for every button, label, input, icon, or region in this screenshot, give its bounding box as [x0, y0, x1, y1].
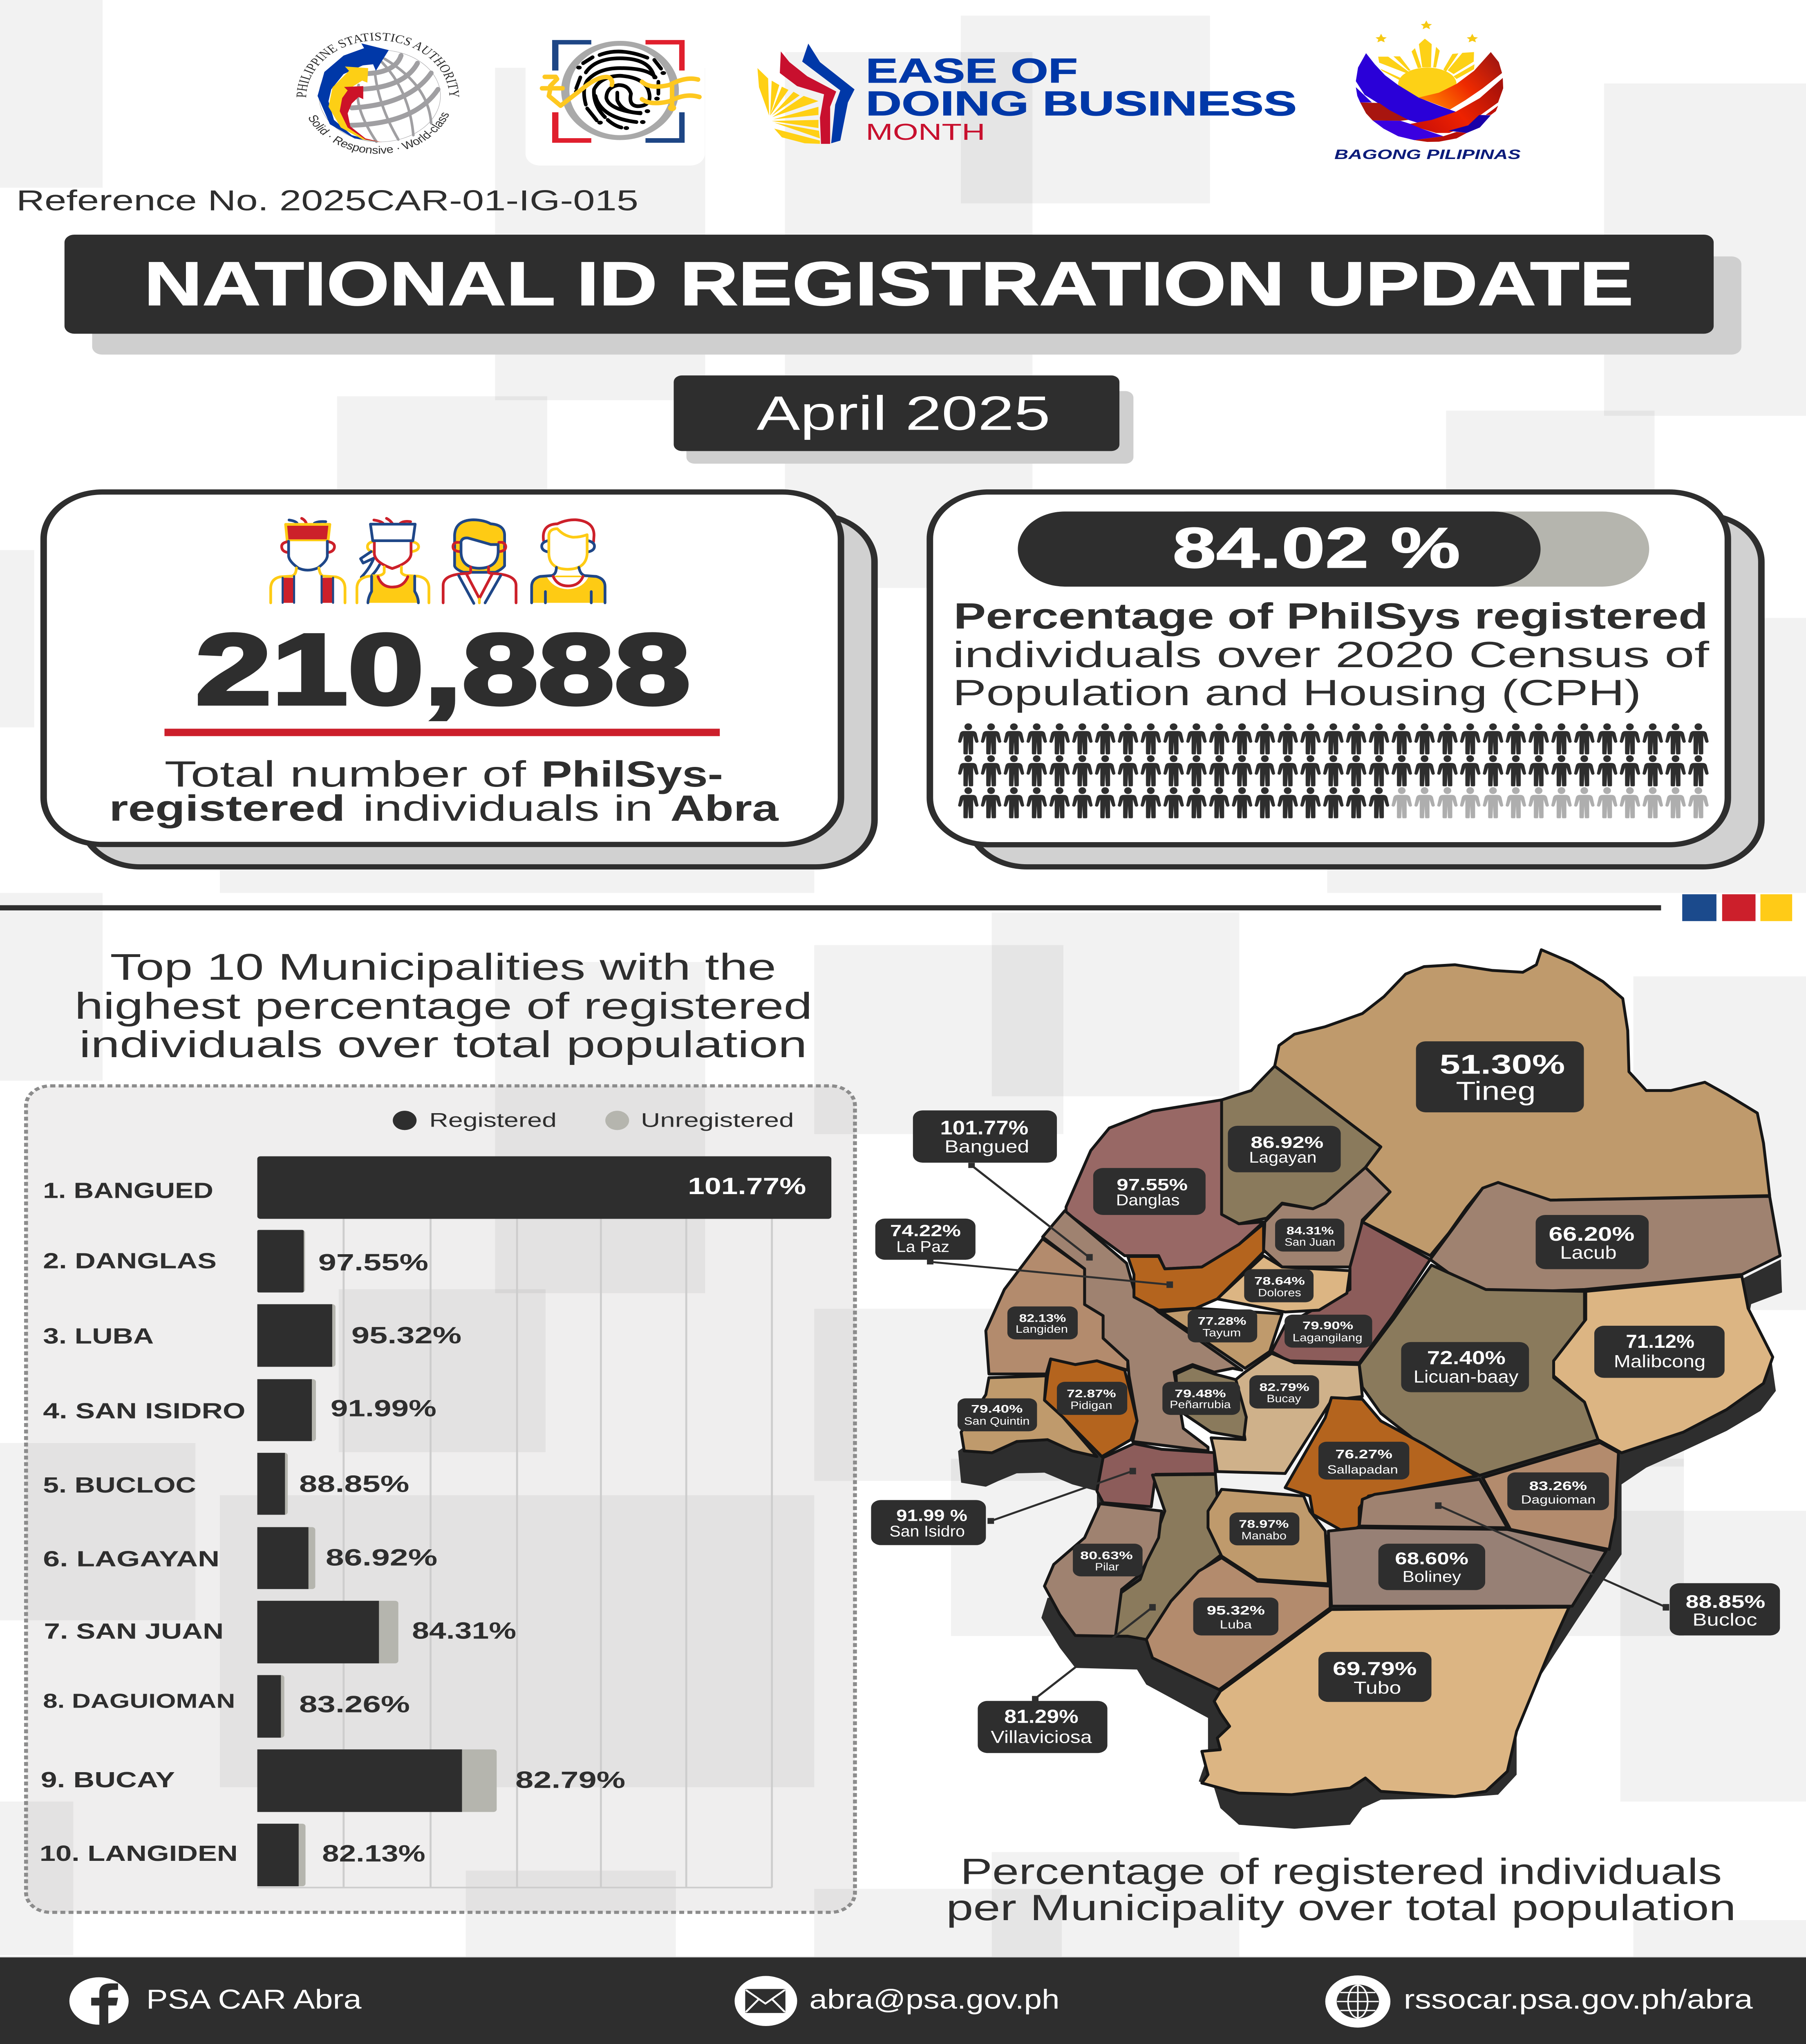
red underline	[164, 729, 720, 736]
region: Bucloc	[1359, 1479, 1507, 1528]
legend: Registered	[429, 1109, 557, 1131]
bar: Bucay: 9. BUCAY	[41, 1767, 175, 1792]
description: PhilSys-	[542, 754, 723, 795]
region: San Quintin	[961, 1376, 1097, 1457]
seal ring text	[293, 30, 462, 156]
bar: Langiden: 10. LANGIDEN	[40, 1840, 238, 1865]
label: Danglas: Danglas	[1116, 1192, 1179, 1209]
region: Pidigan	[1045, 1359, 1137, 1457]
bar: Bucay: 82.79%	[515, 1766, 625, 1793]
logo: Philippine Statistics Authority seal	[293, 30, 462, 156]
label: Bucloc: 88.85%	[1686, 1591, 1765, 1612]
panel: percentage of registered individuals	[930, 492, 1761, 867]
heading: top 10 municipalities	[74, 946, 812, 1065]
label: Sallapadan: 76.27%	[1335, 1448, 1392, 1461]
label: San Isidro: 91.99 %	[896, 1506, 967, 1524]
region: Dolores	[1217, 1256, 1350, 1312]
wordmark: DOING BUSINESS	[866, 84, 1297, 123]
region: Lacub	[1430, 1183, 1780, 1293]
progress pill	[1018, 511, 1649, 587]
legend	[393, 1109, 794, 1131]
label: Manabo	[1229, 1513, 1299, 1545]
label: San Juan: San Juan	[1285, 1237, 1335, 1248]
label: Daguioman: 83.26%	[1529, 1479, 1587, 1493]
label: Malibcong: Malibcong	[1614, 1351, 1705, 1371]
section divider	[0, 894, 1792, 921]
label: Daguioman	[1507, 1472, 1609, 1510]
region: Bucay	[1211, 1353, 1362, 1473]
label: San Quintin: 79.40%	[971, 1403, 1023, 1415]
region: La Paz	[1128, 1224, 1264, 1310]
label: Manabo: Manabo	[1242, 1531, 1287, 1542]
description: registered	[109, 788, 345, 829]
seal ring text: Solid · Responsive · World-class	[305, 110, 452, 156]
bar: Danglas: 97.55%	[318, 1249, 428, 1275]
label: San Isidro: San Isidro	[889, 1523, 965, 1540]
progress pill: 84.02 %	[1173, 515, 1460, 580]
heading: top 10 municipalities: highest percentage of registered	[74, 985, 812, 1026]
title banner: NATIONAL ID REGISTRATION UPDATE	[144, 249, 1634, 318]
wordmark: MONTH	[866, 120, 985, 145]
map caption: per Municipality over total population	[946, 1888, 1736, 1928]
label: Bangued: Bangued	[944, 1137, 1029, 1156]
label: Penarrubia: Peñarrubia	[1170, 1399, 1231, 1411]
date banner	[674, 375, 1133, 464]
bar: Luba	[43, 1304, 461, 1367]
wordmark: EASE OF	[866, 52, 1078, 90]
label: Dolores	[1244, 1269, 1314, 1302]
logo: fingerprint PhilSys mark	[526, 0, 705, 166]
bar: Luba: 95.32%	[351, 1322, 461, 1348]
label: Sallapadan	[1318, 1442, 1409, 1479]
bar: Danglas	[43, 1230, 428, 1293]
icon: facebook	[69, 1977, 129, 2025]
label: Lagayan	[1228, 1126, 1341, 1172]
map regions south	[1045, 1398, 1618, 1796]
bar: Langiden: 82.13%	[322, 1840, 425, 1867]
bar: San Isidro: 91.99%	[331, 1395, 436, 1421]
label: Bucay	[1249, 1375, 1319, 1408]
bar: San Isidro: 4. SAN ISIDRO	[43, 1398, 245, 1423]
region: Lagayan	[1222, 1066, 1381, 1224]
label: Lagangilang	[1285, 1315, 1372, 1348]
region: Licuan-baay	[1359, 1265, 1598, 1475]
region: Villaviciosa	[1115, 1475, 1222, 1640]
region: Tubo	[1202, 1607, 1569, 1796]
region: Danglas	[1066, 1100, 1264, 1269]
label: Penarrubia: 79.48%	[1175, 1387, 1226, 1400]
label: Boliney: Boliney	[1403, 1568, 1461, 1585]
label: Lacub: Lacub	[1560, 1242, 1617, 1263]
map extrusion shadow	[958, 1260, 1782, 1829]
description: individuals in	[363, 788, 653, 829]
wordmark	[866, 52, 1297, 145]
text: website: rssocar.psa.gov.ph/abra	[1404, 1984, 1753, 2015]
label: Tineg	[1416, 1041, 1584, 1112]
bar: San Juan: 84.31%	[412, 1617, 516, 1644]
date banner: April 2025	[756, 386, 1050, 440]
label: Villaviciosa	[978, 1701, 1108, 1753]
bar: Bucloc: 88.85%	[299, 1470, 409, 1497]
map caption: Percentage of registered individuals	[960, 1851, 1722, 1892]
label: Licuan-baay: Licuan-baay	[1414, 1367, 1519, 1387]
label: San Juan	[1275, 1219, 1344, 1252]
label: Dolores: 78.64%	[1254, 1275, 1305, 1287]
bar: Luba: 3. LUBA	[43, 1323, 154, 1348]
label: Boliney: 68.60%	[1395, 1549, 1468, 1568]
label: San Quintin: San Quintin	[964, 1416, 1030, 1427]
label: San Isidro	[871, 1500, 986, 1545]
label: Lagangilang: 79.90%	[1302, 1320, 1353, 1332]
label: Malibcong	[1594, 1326, 1725, 1378]
region: Daguioman	[1483, 1443, 1618, 1549]
label: Pilar	[1073, 1544, 1143, 1576]
panel: top 10 bar chart	[26, 1086, 855, 1912]
icon: four people in traditional dress	[271, 518, 605, 603]
map: Abra municipalities	[871, 950, 1782, 1829]
label: Lagangilang: Lagangilang	[1293, 1332, 1363, 1344]
region: San Juan	[1264, 1168, 1390, 1267]
description: Percentage of PhilSys registered	[953, 596, 1708, 637]
bar: Bucloc: 5. BUCLOC	[43, 1472, 196, 1497]
text: facebook page: PSA CAR Abra	[146, 1984, 362, 2015]
region: Luba	[1146, 1558, 1330, 1690]
label: La Paz: La Paz	[896, 1238, 949, 1255]
bar: Lagayan: 6. LAGAYAN	[43, 1546, 219, 1571]
bar: Bucloc	[43, 1453, 409, 1515]
label: Langiden	[1007, 1307, 1078, 1339]
label: Tineg: 51.30%	[1439, 1049, 1565, 1080]
bar: Daguioman: 83.26%	[299, 1691, 410, 1717]
legend: Unregistered	[641, 1109, 794, 1131]
logo: Bagong Pilipinas: BAGONG PILIPINAS	[1334, 147, 1521, 162]
label: Bucay: Bucay	[1267, 1393, 1301, 1405]
region: Manabo	[1208, 1489, 1328, 1584]
description: individuals over 2020 Census of	[953, 634, 1710, 675]
bar: San Isidro	[43, 1379, 436, 1441]
label: Luba: Luba	[1220, 1618, 1252, 1631]
description: Total number of	[164, 754, 526, 795]
heading: top 10 municipalities: individuals over total population	[79, 1024, 807, 1065]
region: Lagangilang	[1271, 1222, 1430, 1363]
label: Luba: 95.32%	[1207, 1604, 1265, 1617]
bar: Bangued: 1. BANGUED	[43, 1178, 213, 1203]
label: Tayum: Tayum	[1202, 1327, 1241, 1339]
title banner	[65, 235, 1741, 354]
label: Villaviciosa: 81.29%	[1004, 1706, 1079, 1727]
label: Tubo: Tubo	[1354, 1678, 1401, 1698]
region: Pilar	[1045, 1504, 1162, 1636]
pictogram: people proportion	[958, 723, 1711, 819]
label: Malibcong: 71.12%	[1626, 1331, 1694, 1352]
total count: 210,888	[195, 613, 691, 725]
label: Bucloc: Bucloc	[1692, 1610, 1757, 1629]
description	[953, 596, 1710, 713]
label: Luba	[1193, 1598, 1278, 1636]
label: Bangued	[913, 1110, 1057, 1163]
bar: Danglas: 2. DANGLAS	[43, 1248, 217, 1273]
label: Licuan-baay	[1401, 1342, 1529, 1392]
bar: Daguioman: 8. DAGUIOMAN	[43, 1689, 235, 1712]
label: Daguioman: Daguioman	[1521, 1493, 1596, 1506]
bar: Langiden	[40, 1824, 425, 1886]
label: Pidigan	[1057, 1382, 1127, 1415]
seal ring text: PHILIPPINE STATISTICS AUTHORITY	[293, 30, 462, 98]
region: Langiden	[986, 1239, 1128, 1374]
label: Lacub	[1536, 1215, 1649, 1269]
region: San Isidro	[1097, 1443, 1215, 1507]
bar: San Juan: 7. SAN JUAN	[44, 1618, 224, 1643]
bar: Daguioman	[43, 1675, 410, 1738]
label: Danglas: 97.55%	[1117, 1175, 1188, 1194]
book and sun emblem	[757, 44, 855, 144]
region: Tayum	[1162, 1308, 1282, 1368]
label: Bucloc	[1669, 1583, 1780, 1636]
label: Tubo	[1318, 1652, 1432, 1702]
label: Lagayan: 86.92%	[1251, 1133, 1323, 1152]
logo: Ease of Doing Business Month	[757, 44, 1297, 145]
label: Langiden: 82.13%	[1019, 1312, 1066, 1325]
label: Dolores: Dolores	[1258, 1287, 1301, 1299]
icon: email	[734, 1976, 797, 2026]
label: Sallapadan: Sallapadan	[1327, 1463, 1398, 1476]
region: Boliney	[1328, 1528, 1606, 1606]
region: Penarrubia	[1176, 1367, 1246, 1438]
heading: top 10 municipalities: Top 10 Municipalities with the	[110, 946, 776, 988]
label: Tayum	[1188, 1309, 1257, 1342]
description: Abra	[670, 788, 779, 829]
logo: Bagong Pilipinas	[1334, 20, 1521, 162]
reference number: Reference No. 2025CAR-01-IG-015	[16, 184, 638, 216]
label: Villaviciosa: Villaviciosa	[991, 1727, 1092, 1747]
label: Tineg: Tineg	[1456, 1077, 1536, 1106]
label: La Paz	[875, 1219, 976, 1260]
label: Penarrubia	[1162, 1382, 1240, 1415]
icon: website globe	[1325, 1975, 1390, 2028]
label: Bucay: 82.79%	[1259, 1381, 1309, 1394]
label: Danglas	[1093, 1168, 1206, 1215]
region: Bangued	[1043, 1210, 1242, 1451]
region: Sallapadan	[1285, 1398, 1477, 1534]
bar: Bangued	[43, 1156, 831, 1219]
region: Malibcong	[1554, 1276, 1773, 1453]
label: Pilar: Pilar	[1095, 1561, 1119, 1573]
label: Boliney	[1379, 1544, 1485, 1590]
region: Tineg	[1275, 950, 1770, 1256]
label: Pidigan: Pidigan	[1070, 1400, 1112, 1412]
label: Lagayan: Lagayan	[1249, 1149, 1317, 1166]
map regions north	[961, 950, 1780, 1475]
bar: Lagayan	[43, 1527, 437, 1589]
leader lines	[927, 1163, 1669, 1701]
bar: Bangued: 101.77%	[688, 1173, 806, 1199]
map caption	[946, 1851, 1736, 1928]
description: Population and Housing (CPH)	[953, 673, 1641, 713]
label: Pilar: 80.63%	[1080, 1549, 1133, 1562]
bar: Lagayan: 86.92%	[326, 1544, 437, 1571]
description	[109, 754, 779, 829]
label: Pidigan: 72.87%	[1067, 1387, 1116, 1400]
bar: Bucay	[41, 1749, 625, 1812]
footer	[0, 1957, 1806, 2044]
label: San Juan: 84.31%	[1287, 1225, 1334, 1237]
label: Langiden: Langiden	[1016, 1324, 1068, 1335]
panel: total registered individuals	[44, 492, 875, 867]
text: email address: abra@psa.gov.ph	[809, 1984, 1059, 2015]
label: Tubo: 69.79%	[1333, 1659, 1417, 1679]
label: Lacub: 66.20%	[1549, 1224, 1634, 1245]
label: Manabo: 78.97%	[1239, 1518, 1289, 1530]
label: La Paz: 74.22%	[890, 1221, 961, 1240]
label: Licuan-baay: 72.40%	[1427, 1347, 1506, 1369]
label: Bangued: 101.77%	[940, 1117, 1028, 1139]
bar: San Juan	[44, 1601, 516, 1663]
label: San Quintin	[958, 1399, 1037, 1431]
label: Tayum: 77.28%	[1197, 1315, 1246, 1327]
